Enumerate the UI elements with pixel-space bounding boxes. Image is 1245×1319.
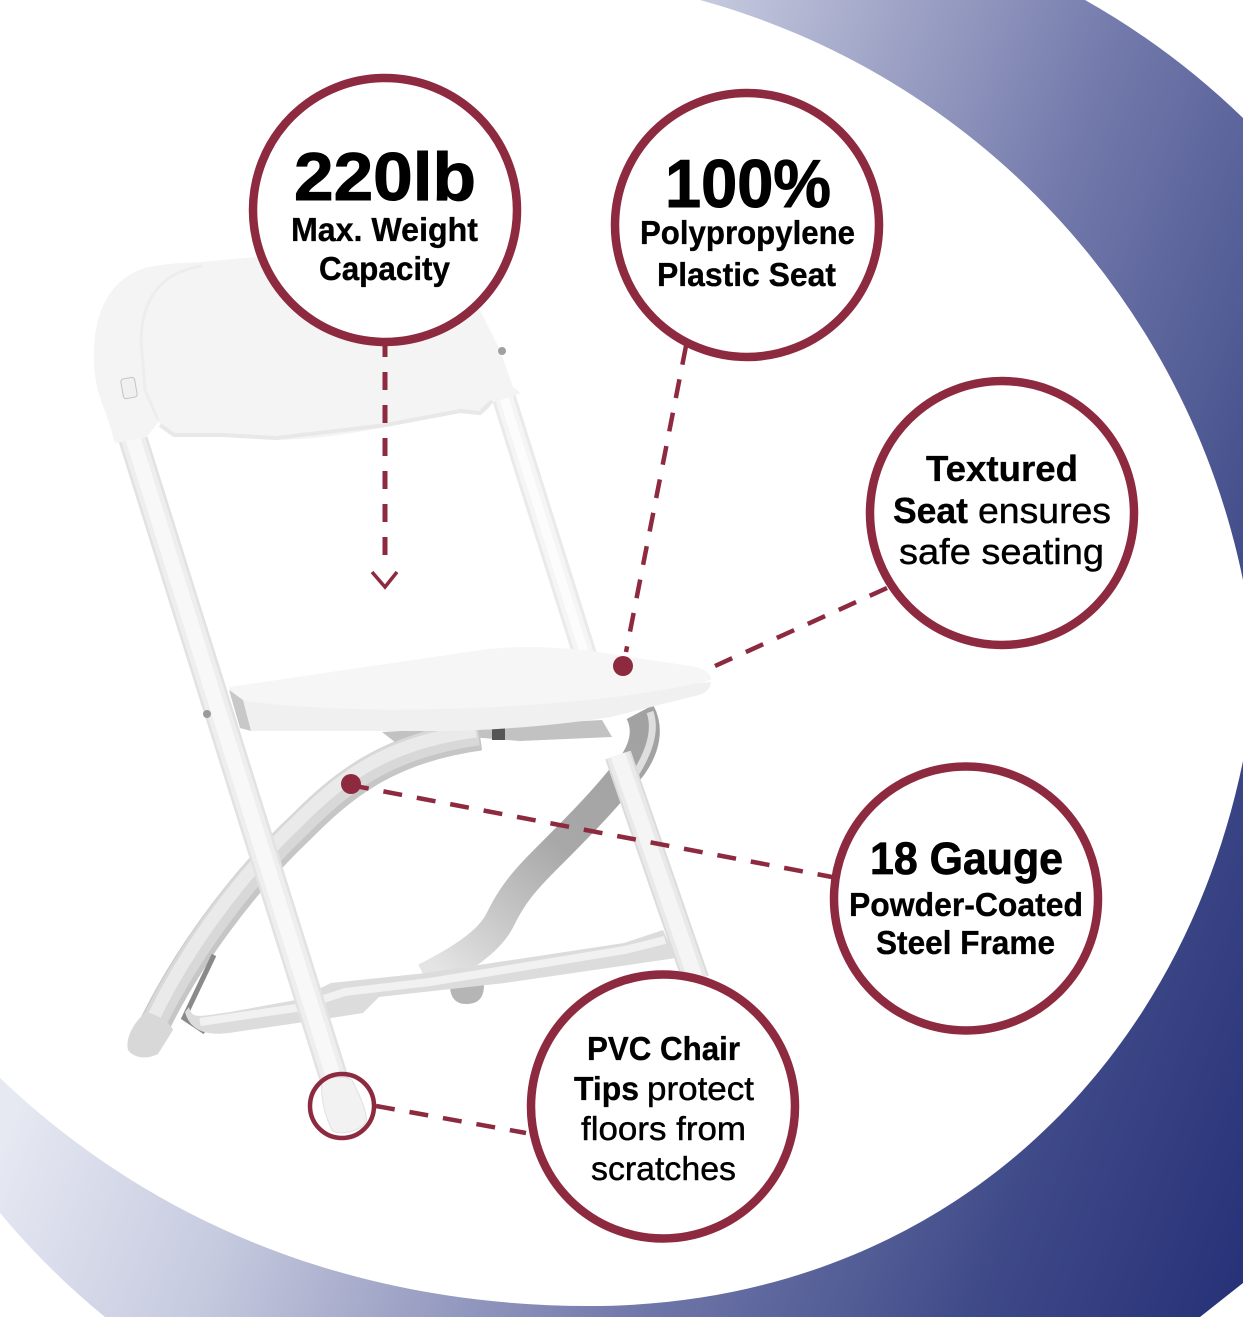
callout: PVC chair tips [531,974,795,1238]
callout: 18 gauge powder-coated steel frame [834,766,1098,1030]
callout: 100% polypropylene plastic seat [615,93,879,357]
callout: PVC chair tips: Tips [574,1070,639,1107]
callout: 100% polypropylene plastic seat: Plastic Seat [657,256,836,293]
chair: bottom bar [185,930,676,1034]
callout: PVC chair tips: protect [647,1070,754,1107]
callout: 220lb max weight capacity: Capacity [319,250,451,287]
callout: 220lb max weight capacity: 220lb [294,139,476,215]
leader: textured seat dashed line [715,588,887,666]
leader: PVC tip dashed line with ring [310,1074,526,1138]
callout: PVC chair tips: floors from [581,1110,746,1147]
callout: PVC chair tips: scratches [591,1150,736,1187]
chair: left front post [132,436,336,1085]
chair: seat support bracket [382,720,612,746]
chair: rear foot [450,985,484,1004]
callout: 100% polypropylene plastic seat: Polypropylene [640,214,855,251]
folding chair illustration [94,257,711,1133]
callout: textured seat: Seat [893,490,968,531]
callout: 18 gauge powder-coated steel frame: Powder-Coated [849,886,1083,923]
callout: textured seat: safe seating [899,531,1104,572]
chair: front crossing tube [148,731,480,1034]
callout: 220lb max weight capacity: Max. Weight [291,211,478,248]
callout: textured seat: ensures [978,490,1111,531]
chair: front foot tip [322,1077,366,1133]
chair: backrest [94,257,521,443]
callout: 18 gauge powder-coated steel frame: 18 Gauge [870,833,1063,884]
callout: 220lb max weight capacity [253,78,517,342]
leader: weight capacity dashed arrow [372,346,397,587]
chair: rear crossing tube [425,712,652,978]
leader: steel frame dashed line with dot [341,774,832,877]
leader: plastic seat dashed line with dot [613,346,686,676]
callout: PVC chair tips: PVC Chair [587,1030,740,1067]
callout: textured seat: Textured [926,448,1078,489]
callout: textured seat [870,381,1134,645]
chair: left rear foot tip [127,1012,173,1057]
callout: 18 gauge powder-coated steel frame: Steel Frame [876,924,1055,961]
callout: 100% polypropylene plastic seat: 100% [665,146,831,222]
chair: seat [203,647,711,731]
chair: right rear leg [618,755,696,980]
chair: dark bar shadow [184,955,214,1032]
chair: right upper post [503,395,585,655]
